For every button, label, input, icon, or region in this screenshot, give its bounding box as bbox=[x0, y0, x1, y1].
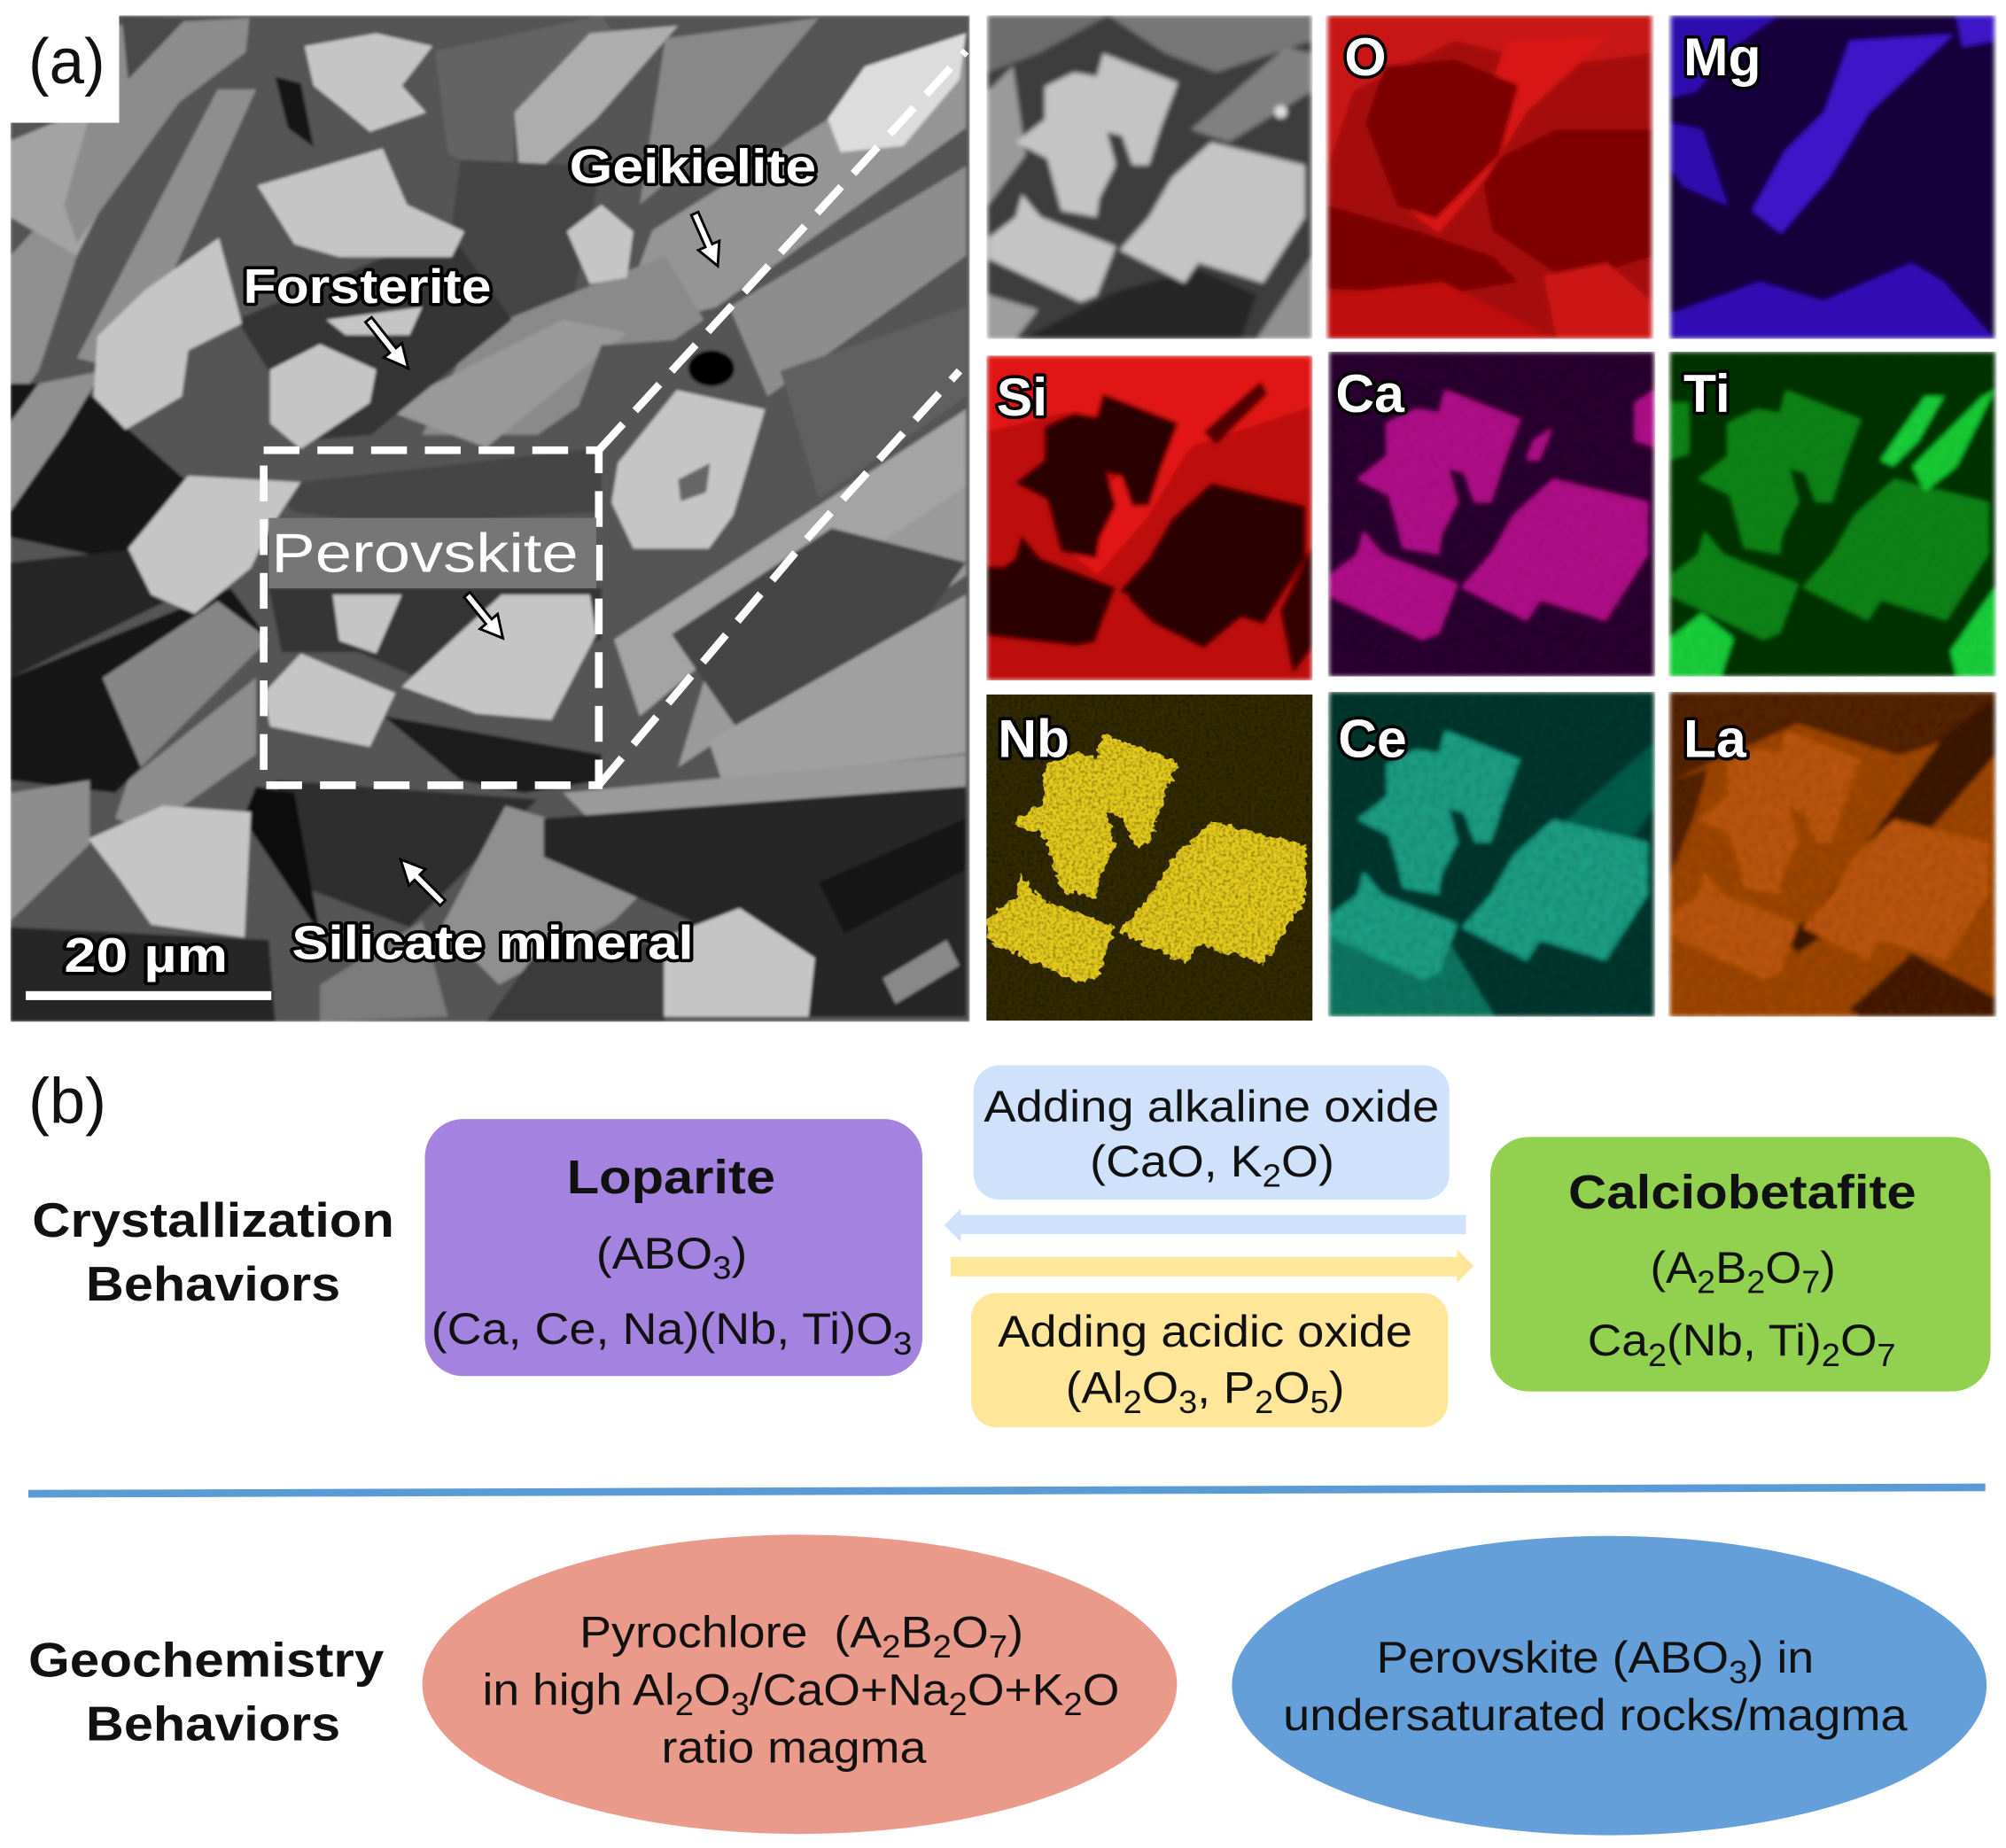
element labels bbox=[997, 27, 1761, 769]
tile: SEM inset bbox=[986, 15, 1313, 338]
ellipse: Perovskite: undersaturated rocks/magma bbox=[1283, 1689, 1909, 1740]
box: Adding acidic oxide: 3 bbox=[1178, 1384, 1197, 1420]
scale bar: 20 µm bbox=[64, 928, 228, 982]
label tab (a): (a) bbox=[28, 27, 105, 97]
ellipse: Perovskite: Perovskite (ABO bbox=[1377, 1632, 1707, 1682]
box: Calciobetafite: 2 bbox=[1648, 1337, 1667, 1373]
box: Calciobetafite: ) bbox=[1820, 1242, 1836, 1293]
ellipse: Pyrochlore: 7 bbox=[989, 1628, 1007, 1665]
box: Adding acidic oxide: Adding acidic oxide bbox=[998, 1306, 1412, 1356]
box: Adding acidic oxide: 2 bbox=[1124, 1384, 1142, 1420]
callout: Forsterite: Forsterite bbox=[244, 259, 492, 314]
element labels: Ti bbox=[1683, 363, 1730, 423]
tile: Mg map bbox=[1668, 15, 1997, 338]
heading: Crystallization Behaviors: Behaviors bbox=[86, 1256, 340, 1311]
ellipse: Pyrochlore: O+K bbox=[968, 1664, 1064, 1714]
callout: Forsterite bbox=[244, 259, 492, 369]
box: Calciobetafite: O bbox=[1840, 1315, 1877, 1365]
box: Loparite: (Ca, Ce, Na)(Nb, Ti)O bbox=[432, 1303, 864, 1354]
box: Calciobetafite: Ca bbox=[1588, 1315, 1644, 1365]
tile: Ti map bbox=[1668, 352, 1997, 677]
callout: Geikielite: Geikielite bbox=[570, 138, 816, 193]
element labels: Si bbox=[997, 367, 1047, 427]
box: Calciobetafite: 2 bbox=[1822, 1337, 1840, 1373]
element labels: O bbox=[1344, 27, 1387, 87]
box: Calciobetafite: (Nb, Ti) bbox=[1667, 1315, 1822, 1365]
heading: Geochemistry Behaviors: Geochemistry bbox=[28, 1633, 385, 1688]
box: Calciobetafite: 7 bbox=[1877, 1337, 1896, 1373]
callout: Silicate mineral bbox=[292, 859, 694, 970]
box: Calciobetafite: B bbox=[1715, 1242, 1746, 1293]
box: Adding alkaline oxide: (CaO, K bbox=[1090, 1136, 1252, 1186]
callout: Silicate mineral: Silicate mineral bbox=[292, 918, 694, 970]
ellipse: Pyrochlore: /CaO+Na bbox=[750, 1664, 950, 1714]
box: Adding acidic oxide: 2 bbox=[1255, 1384, 1273, 1420]
tile: Nb map bbox=[986, 695, 1313, 1021]
ellipse: Pyrochlore: 2 bbox=[933, 1628, 952, 1665]
panel a: micrograph and element maps bbox=[0, 0, 1995, 1021]
label tab (a) bbox=[0, 0, 119, 123]
tile: Si map bbox=[986, 355, 1313, 680]
box: Adding acidic oxide: ) bbox=[1329, 1363, 1344, 1413]
element labels: Ce bbox=[1338, 709, 1407, 769]
box: Adding alkaline oxide: Adding alkaline oxide bbox=[984, 1081, 1439, 1131]
panel b: crystallization and geochemistry bbox=[28, 1066, 1990, 1836]
ellipse: Pyrochlore: 2 bbox=[882, 1628, 901, 1665]
ellipse: Perovskite: ) in bbox=[1748, 1632, 1814, 1682]
ellipse: Pyrochlore: 2 bbox=[675, 1686, 694, 1722]
tile: O map bbox=[1326, 15, 1654, 338]
box: Calciobetafite: 7 bbox=[1801, 1263, 1820, 1300]
box: Loparite bbox=[424, 1119, 922, 1376]
box: Calciobetafite: 2 bbox=[1746, 1263, 1765, 1300]
box: Calciobetafite: 2 bbox=[1697, 1263, 1715, 1300]
callout: Perovskite bbox=[268, 518, 596, 638]
element labels: Ca bbox=[1335, 363, 1405, 423]
box: Adding acidic oxide: 5 bbox=[1310, 1384, 1329, 1420]
ellipse: Pyrochlore: in high Al bbox=[482, 1664, 664, 1714]
label (b): (b) bbox=[28, 1066, 106, 1137]
SEM micrograph bbox=[0, 0, 969, 1021]
ellipse: Pyrochlore: O bbox=[694, 1664, 731, 1714]
zoom region dashed box and guide lines bbox=[264, 51, 966, 785]
ellipse: Pyrochlore: ) bbox=[1007, 1606, 1023, 1657]
box: Calciobetafite: Calciobetafite bbox=[1568, 1167, 1917, 1219]
ellipse: Pyrochlore: B bbox=[901, 1606, 933, 1657]
box: Adding alkaline oxide: 2 bbox=[1263, 1158, 1281, 1194]
tile: Ce map bbox=[1327, 692, 1655, 1017]
callout: Geikielite bbox=[570, 138, 816, 266]
box: Calciobetafite: O bbox=[1765, 1242, 1801, 1293]
box: Adding acidic oxide: (Al bbox=[1066, 1363, 1120, 1413]
heading: Crystallization Behaviors bbox=[32, 1192, 394, 1311]
box: Loparite: 3 bbox=[893, 1325, 913, 1362]
element map grid bbox=[986, 15, 1995, 1021]
box: Adding alkaline oxide: O) bbox=[1281, 1136, 1334, 1186]
ellipse: Pyrochlore: 2 bbox=[949, 1686, 968, 1722]
box: Loparite: ) bbox=[731, 1228, 747, 1278]
ellipse: Pyrochlore: O bbox=[1083, 1664, 1119, 1714]
ellipse: Pyrochlore: 3 bbox=[731, 1686, 750, 1722]
heading: Geochemistry Behaviors bbox=[28, 1633, 385, 1751]
box: Adding acidic oxide: , P bbox=[1197, 1363, 1255, 1413]
box: Adding acidic oxide: O bbox=[1273, 1363, 1310, 1413]
ellipse: Pyrochlore bbox=[423, 1534, 1177, 1834]
arrow: toward Loparite bbox=[945, 1208, 1466, 1242]
tile: Ca map bbox=[1327, 352, 1655, 677]
heading: Crystallization Behaviors: Crystallization bbox=[32, 1192, 394, 1247]
box: Calciobetafite: (A bbox=[1650, 1242, 1695, 1293]
tile: La map bbox=[1668, 692, 1997, 1017]
ellipse: Pyrochlore: ratio magma bbox=[662, 1721, 927, 1772]
box: Adding acidic oxide bbox=[971, 1293, 1448, 1427]
box: Adding acidic oxide: O bbox=[1142, 1363, 1178, 1413]
heading: Geochemistry Behaviors: Behaviors bbox=[86, 1697, 340, 1751]
scale bar bbox=[26, 928, 271, 1000]
element labels: La bbox=[1683, 709, 1747, 769]
box: Loparite: 3 bbox=[712, 1250, 731, 1286]
callout: Perovskite: Perovskite bbox=[271, 523, 579, 584]
element labels: Mg bbox=[1683, 27, 1761, 87]
ellipse: Pyrochlore: 2 bbox=[1063, 1686, 1083, 1722]
box: Adding alkaline oxide bbox=[974, 1066, 1450, 1200]
box: Loparite: Loparite bbox=[567, 1152, 775, 1204]
ellipse: Pyrochlore: Pyrochlore (A bbox=[579, 1606, 863, 1657]
arrow: toward Calciobetafite bbox=[951, 1249, 1473, 1283]
box: Loparite: (ABO bbox=[596, 1228, 705, 1278]
ellipse: Pyrochlore: O bbox=[952, 1606, 989, 1657]
ellipse: Perovskite bbox=[1232, 1536, 1987, 1836]
box: Calciobetafite bbox=[1490, 1137, 1990, 1392]
element labels: Nb bbox=[998, 709, 1069, 769]
ellipse: Perovskite: 3 bbox=[1729, 1654, 1748, 1690]
